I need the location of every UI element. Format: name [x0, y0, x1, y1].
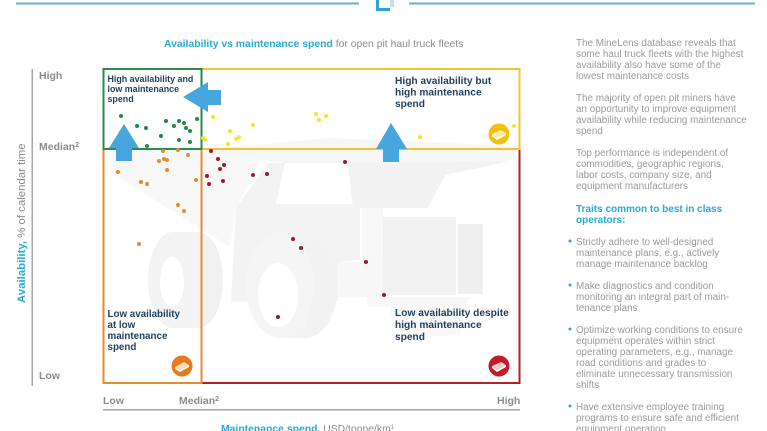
x axis labels: 2	[215, 396, 219, 403]
label: low availability high spend: high maintenance	[395, 320, 482, 331]
x axis labels: Low	[103, 395, 125, 407]
header rule with logo	[16, 0, 755, 11]
icon: yellow coin	[488, 124, 510, 144]
bullet 3: eliminate unnecessary transmission	[576, 369, 732, 380]
sidebar text: paragraph 3: commodities, geographic regions,	[576, 159, 724, 170]
label: high availability high spend: high maintenance	[395, 88, 482, 98]
label: low availability high spend: spend	[395, 332, 425, 343]
quadrant: low availability low spend	[104, 149, 202, 383]
sidebar text: paragraph 1: some haul truck fleets with the highest	[576, 49, 744, 60]
bullet 1	[568, 237, 719, 270]
sidebar text: paragraph 3: Top performance is independent of	[576, 148, 728, 159]
sidebar text: paragraph 1: lowest maintenance costs	[576, 71, 689, 82]
bullet 2: monitoring an integral part of main-	[576, 292, 729, 303]
x axis labels: Median	[179, 395, 215, 407]
sidebar text: paragraph 2: spend	[576, 126, 603, 137]
label: high availability high spend: spend	[395, 99, 425, 110]
bullet 2	[568, 281, 729, 314]
label: low availability low spend: Low availability	[108, 309, 180, 320]
label: low availability low spend: at low	[108, 320, 136, 331]
x axis title: 1	[391, 425, 395, 431]
label: low availability low spend: maintenance	[108, 331, 168, 342]
x axis labels	[103, 395, 520, 407]
x axis line	[103, 409, 520, 410]
quadrant: low availability high spend	[202, 149, 520, 383]
sidebar text: paragraph 3: labor costs, company size, and	[576, 170, 712, 181]
y axis title: Availability, % of calendar time	[16, 143, 28, 303]
sidebar text: paragraph 3: equipment manufacturers	[576, 181, 688, 192]
red points	[205, 149, 386, 319]
label: high availability high spend: High availability but	[395, 76, 491, 87]
sidebar heading: traits: operators:	[576, 215, 625, 226]
label: high availability and low spend: spend	[108, 94, 134, 104]
sidebar text: paragraph 2: The majority of open pit miners have	[576, 93, 736, 104]
bullet 1: manage maintenance backlog	[576, 259, 708, 270]
label: high availability and low spend: High availability and	[108, 74, 193, 84]
arrow: up from low availability at high spend	[376, 123, 407, 162]
sidebar text: paragraph 1: The MineLens database reveals that	[576, 38, 736, 49]
quadrant: high availability low spend	[104, 69, 202, 149]
green points	[119, 114, 199, 148]
y axis line	[32, 69, 33, 386]
bullet 3: road conditions and grades to	[576, 358, 707, 369]
sidebar text: paragraph 2: an opportunity to improve equipment	[576, 104, 737, 115]
label: high availability and low spend: low maintenance	[108, 84, 179, 94]
sidebar heading: traits: Traits common to best in class	[576, 204, 722, 215]
truck silhouette background	[110, 138, 515, 338]
chart title: Availability vs maintenance spend for open pit haul truck fleets	[164, 39, 463, 50]
y axis labels: High	[39, 70, 62, 82]
arrow: up from low availability at low spend	[109, 124, 139, 161]
bullet 4: Have extensive employee training	[576, 402, 724, 413]
bullet 2: tenance plans	[576, 303, 638, 314]
label: low availability low spend: spend	[108, 342, 136, 353]
label: low availability high spend: Low availability despite	[395, 308, 509, 319]
bullet 3: operating parameters, e.g., manage	[576, 347, 734, 358]
quadrant: high availability high spend	[202, 69, 520, 149]
bullet 3: Optimize working conditions to ensure	[576, 325, 743, 336]
arrow: left to low spend	[183, 82, 221, 112]
orange points	[116, 148, 198, 246]
icon: red coin	[488, 356, 510, 376]
bullet 1: maintenance plans, e.g., actively	[576, 248, 719, 259]
y axis labels	[39, 70, 79, 382]
sidebar text: paragraph 2: availability while reducing maintenance	[576, 115, 747, 126]
bullet 3: equipment operates within strict	[576, 336, 715, 347]
x axis labels: High	[497, 395, 520, 407]
bullet 4: programs to ensure safe and efficient	[576, 413, 739, 424]
yellow points	[201, 112, 516, 146]
sidebar text: paragraph 1: availability also have some of the	[576, 60, 721, 71]
bullet 2: Make diagnostics and condition	[576, 281, 714, 292]
icon: orange coin	[172, 356, 192, 376]
y axis labels: Median	[39, 141, 75, 153]
bullet 3	[568, 325, 743, 391]
y axis labels: Low	[39, 370, 61, 382]
y axis labels: 2	[75, 142, 79, 149]
bullet 1: Strictly adhere to well-designed	[576, 237, 713, 248]
bullet 4	[568, 402, 739, 431]
bullet 3: shifts	[576, 380, 599, 391]
